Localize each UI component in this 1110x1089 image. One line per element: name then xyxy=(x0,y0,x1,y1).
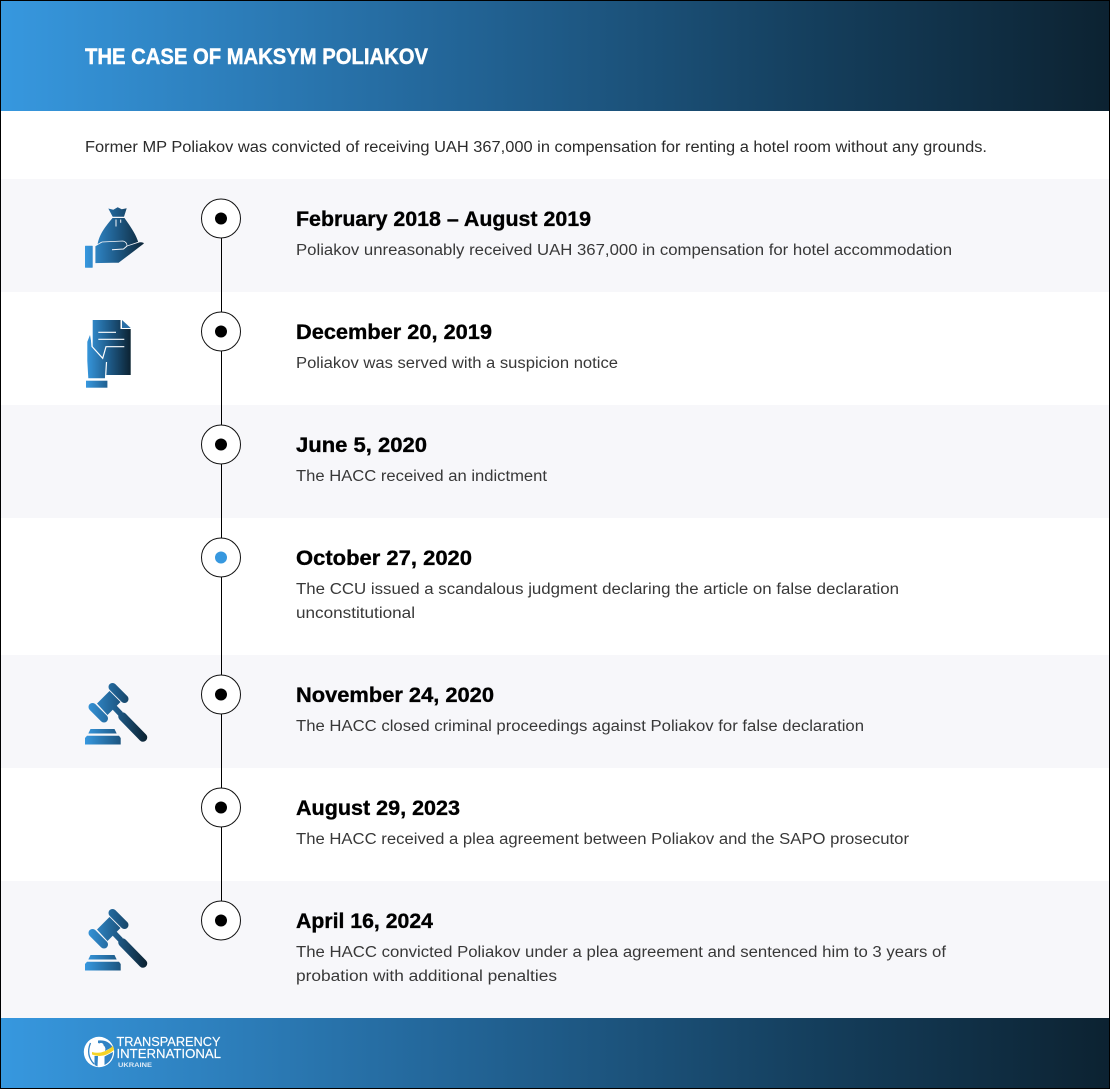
icon: document in hand xyxy=(86,320,131,388)
event: February 2018 – August 2019 xyxy=(296,208,952,259)
event: August 29, 2023: August 29, 2023 xyxy=(296,797,460,820)
timeline axis xyxy=(220,238,222,901)
event: April 16, 2024: April 16, 2024 xyxy=(296,910,433,933)
event: April 16, 2024 xyxy=(296,910,947,985)
event: November 24, 2020: The HACC closed criminal proceedings against Poliakov for false declaration xyxy=(296,718,864,735)
event: December 20, 2019 xyxy=(296,321,618,372)
event: April 16, 2024: The HACC convicted Poliakov under a plea agreement and sentenced him to 3 years of xyxy=(296,944,947,961)
event: December 20, 2019: December 20, 2019 xyxy=(296,321,492,344)
timeline marker: December 2019 xyxy=(202,312,240,351)
icon: money bag in hand xyxy=(85,207,144,268)
icon: gavel xyxy=(85,913,143,970)
logo: Transparency International Ukraine xyxy=(84,1035,221,1069)
event: August 29, 2023: The HACC received a plea agreement between Poliakov and the SAPO prosecutor xyxy=(296,831,909,848)
timeline marker: August 2023 xyxy=(202,788,240,827)
timeline marker: February 2018 xyxy=(202,199,240,238)
event: February 2018 – August 2019: Poliakov unreasonably received UAH 367,000 in compensation for hotel accommodation xyxy=(296,242,952,259)
timeline marker: April 2024 xyxy=(202,901,240,940)
event: October 27, 2020: October 27, 2020 xyxy=(296,547,472,570)
event: February 2018 – August 2019: February 2018 – August 2019 xyxy=(296,208,591,231)
logo: Transparency International Ukraine: UKRAINE xyxy=(118,1062,153,1069)
event: November 24, 2020 xyxy=(296,684,864,735)
intro text: Former MP Poliakov was convicted of receiving UAH 367,000 in compensation for renting a hotel room without any grounds. xyxy=(85,139,987,156)
logo: Transparency International Ukraine: INTERNATIONAL xyxy=(116,1047,221,1061)
event: November 24, 2020: November 24, 2020 xyxy=(296,684,494,707)
event: October 27, 2020 xyxy=(296,547,899,622)
event: December 20, 2019: Poliakov was served with a suspicion notice xyxy=(296,355,618,372)
timeline marker: June 2020 xyxy=(202,425,240,464)
event: June 5, 2020 xyxy=(296,434,548,485)
timeline marker: October 2020 (blue) xyxy=(202,538,240,577)
event: October 27, 2020: The CCU issued a scandalous judgment declaring the article on false declaration xyxy=(296,581,899,598)
event: August 29, 2023 xyxy=(296,797,909,848)
header banner xyxy=(0,0,1110,111)
event: April 16, 2024: probation with additional penalties xyxy=(296,968,557,985)
event: June 5, 2020: June 5, 2020 xyxy=(296,434,427,457)
event: June 5, 2020: The HACC received an indictment xyxy=(296,468,548,485)
title: THE CASE OF MAKSYM POLIAKOV xyxy=(85,44,428,69)
timeline marker: November 2020 xyxy=(202,675,240,714)
icon: gavel xyxy=(85,687,143,744)
panel: row backgrounds xyxy=(0,179,1110,1018)
footer banner xyxy=(0,1018,1110,1088)
logo: Transparency International Ukraine: TRANSPARENCY xyxy=(116,1035,221,1049)
event: October 27, 2020: unconstitutional xyxy=(296,605,415,622)
